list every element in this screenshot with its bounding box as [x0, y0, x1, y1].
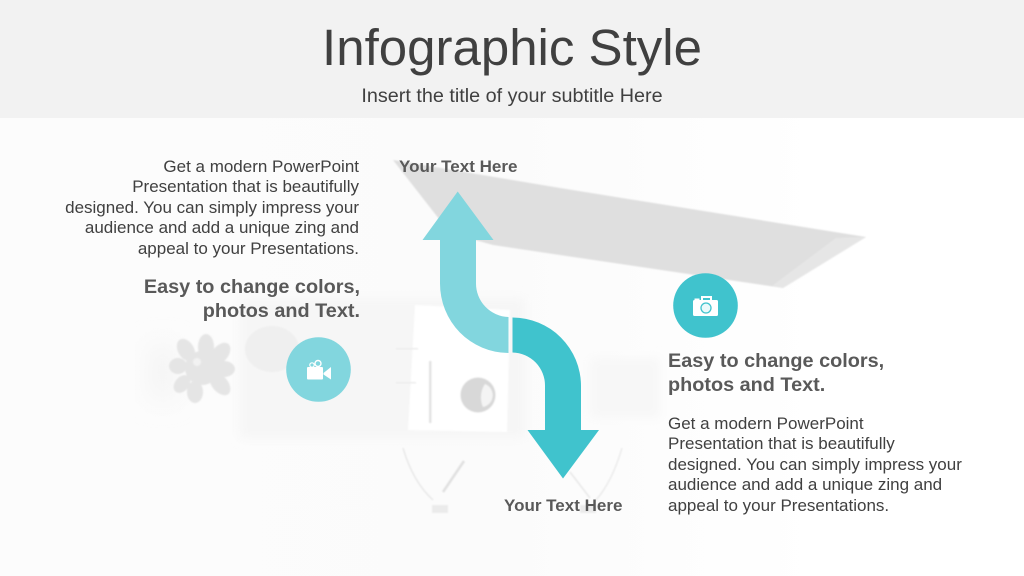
notebook: [408, 305, 510, 432]
right text block: appeal to your Presentations.: [668, 496, 889, 515]
right bold heading: Easy to change colors,: [668, 350, 884, 372]
header band: [0, 0, 1024, 118]
arrow: down, dark teal: [512, 318, 599, 478]
label: bottom arrow: Your Text Here: [504, 496, 622, 515]
left text block: audience and add a unique zing and: [85, 218, 359, 237]
arrow: up, light teal: [422, 192, 508, 353]
right text block: Get a modern PowerPoint: [668, 414, 864, 433]
left bold heading: [144, 276, 360, 322]
icon: video camera circle: [286, 337, 351, 402]
right text block: Presentation that is beautifully: [668, 434, 895, 453]
left text block: Presentation that is beautifully: [132, 177, 359, 196]
left text block: Get a modern PowerPoint: [163, 157, 359, 176]
left bold heading: Easy to change colors,: [144, 276, 360, 298]
left text block: appeal to your Presentations.: [138, 239, 359, 258]
left bold heading: photos and Text.: [203, 300, 360, 322]
title: Infographic Style: [322, 19, 702, 76]
monitor: [393, 160, 866, 288]
subtitle: Insert the title of your subtitle Here: [361, 85, 663, 107]
glasses: [403, 448, 433, 500]
icon: camera circle: [673, 273, 738, 338]
left text block: designed. You can simply impress your: [65, 198, 359, 217]
right bold heading: [668, 350, 884, 396]
right bold heading: photos and Text.: [668, 374, 825, 396]
right text block: audience and add a unique zing and: [668, 475, 942, 494]
flower: [169, 334, 235, 403]
cup: [460, 378, 496, 412]
label: top arrow: Your Text Here: [399, 157, 517, 176]
left text block: [65, 157, 359, 258]
right text block: [668, 414, 962, 515]
right text block: designed. You can simply impress your: [668, 455, 962, 474]
vase shape: [245, 326, 299, 372]
